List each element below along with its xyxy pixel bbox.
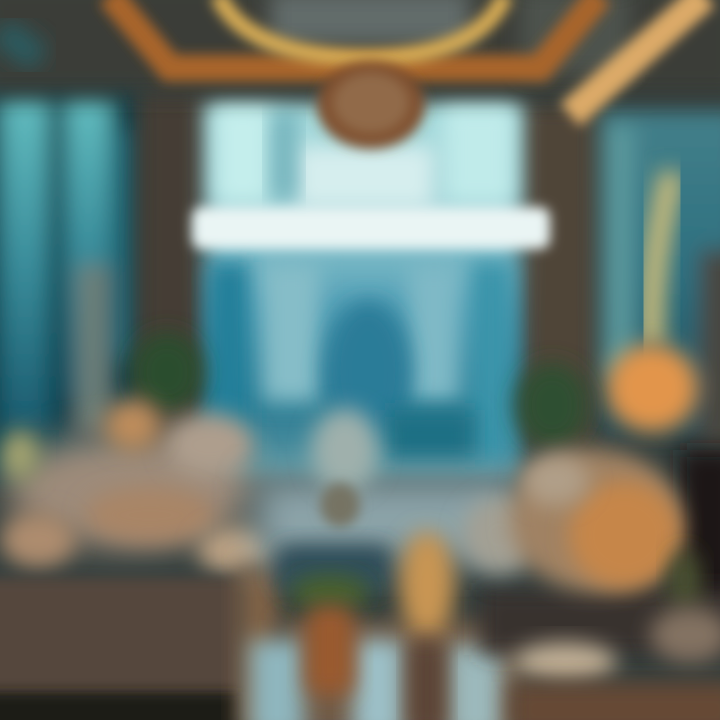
icon: ceiling medallion xyxy=(317,61,425,149)
icon: right plant xyxy=(516,363,588,447)
icon: orange lantern xyxy=(606,344,698,432)
white horizontal band xyxy=(192,207,550,249)
panel: central ocean window xyxy=(205,100,521,480)
icon: hanging yellow light strip xyxy=(652,172,672,345)
panel: left seating with cushions xyxy=(0,399,280,720)
panel: left window xyxy=(0,0,140,480)
panel: right window xyxy=(600,110,720,450)
icon: left plant xyxy=(131,332,203,412)
icon: orange vase xyxy=(399,531,455,639)
panel: central floor and tabletop xyxy=(250,408,520,720)
icon: potted plant on table xyxy=(276,545,392,695)
panel: right pillar xyxy=(520,105,598,445)
panel: right seating xyxy=(462,448,720,720)
panel: left pillar xyxy=(138,90,206,430)
panel: ceiling xyxy=(0,0,720,115)
